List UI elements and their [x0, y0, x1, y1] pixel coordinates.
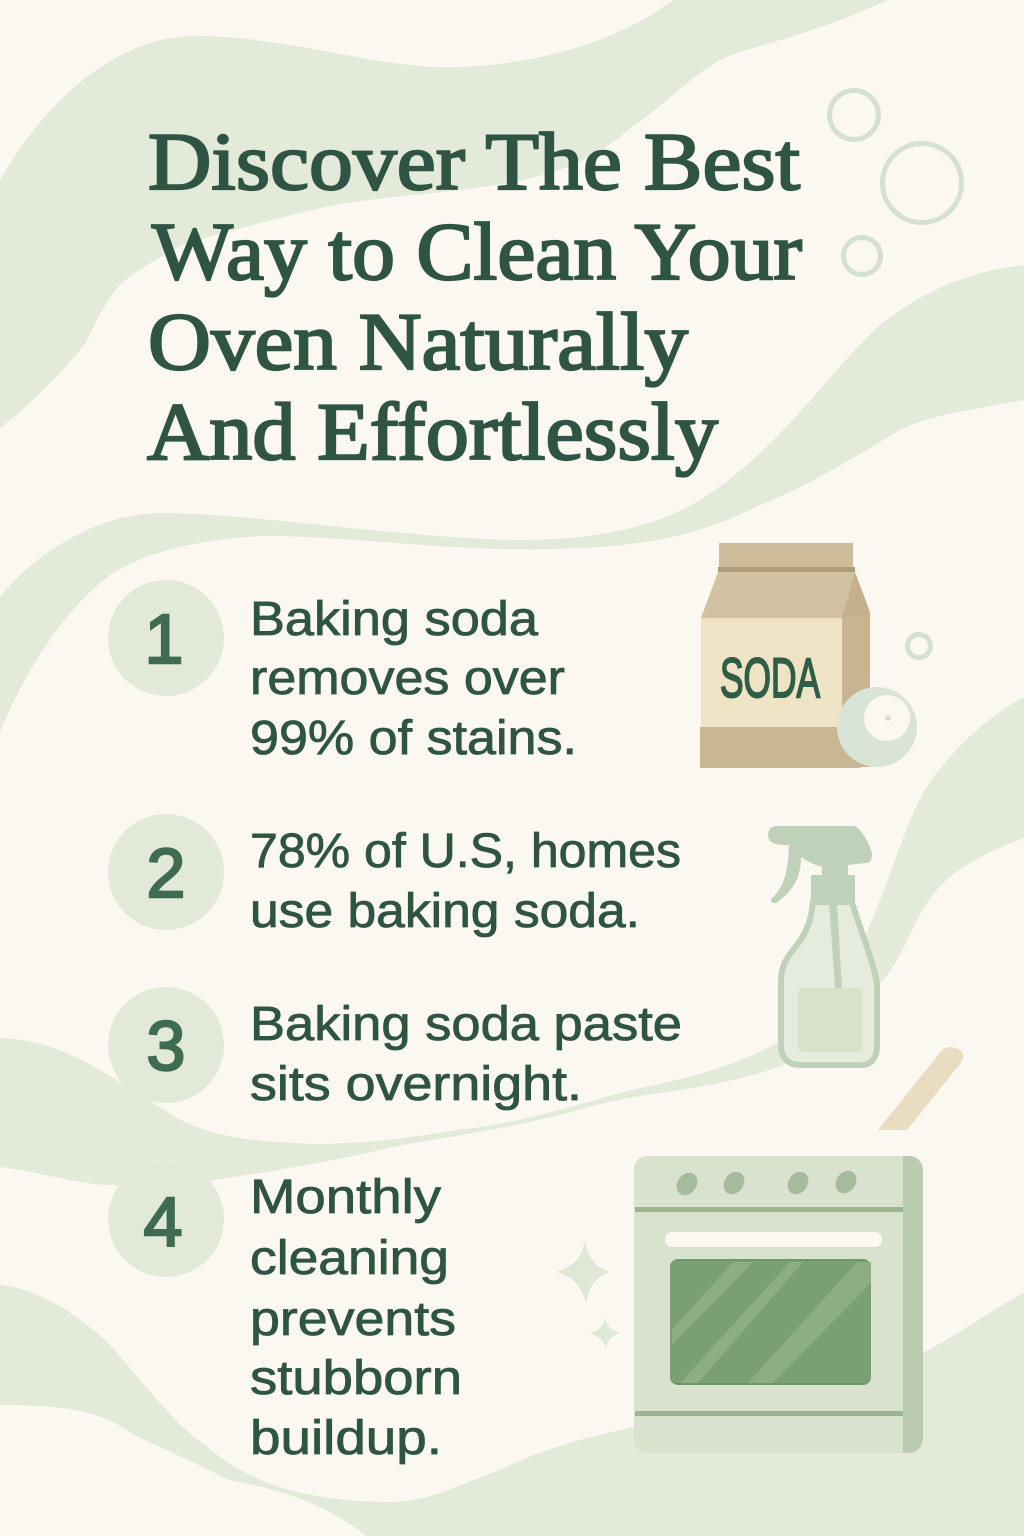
step 4: Monthly: [250, 1171, 441, 1224]
step 2: 2: [147, 834, 185, 912]
icon: soda box: SODA: [720, 646, 820, 709]
title: Way to Clean Your: [152, 206, 802, 297]
icon: bubbles near title: [830, 90, 962, 274]
step 4: prevents: [250, 1293, 456, 1346]
step 4: [108, 1161, 462, 1465]
step 4: cleaning: [250, 1232, 449, 1285]
panel: steps: [108, 580, 682, 1465]
step 4: buildup.: [250, 1412, 442, 1465]
icon: spatula: [878, 1047, 963, 1130]
step 3: sits overnight.: [250, 1058, 582, 1111]
step 1: 1: [145, 600, 183, 678]
title: And Effortlessly: [147, 386, 718, 477]
icon: oven: [634, 1156, 923, 1453]
icon: sparkles: [556, 1240, 620, 1348]
step 4: 4: [144, 1183, 182, 1261]
step 2: 78% of U.S, homes: [250, 825, 681, 878]
step 4: stubborn: [250, 1352, 462, 1405]
title: Discover The Best: [148, 116, 800, 207]
step 1: 99% of stains.: [250, 712, 577, 765]
icon: soda box: [700, 543, 930, 768]
step 1: removes over: [250, 652, 565, 705]
step 3: 3: [147, 1007, 185, 1085]
step 3: Baking soda paste: [250, 998, 682, 1051]
step 2: [108, 814, 681, 938]
step 3: [108, 987, 682, 1111]
title: [147, 116, 802, 477]
step 2: use baking soda.: [250, 885, 640, 938]
step 1: [108, 580, 577, 765]
step 1: Baking soda: [250, 593, 538, 646]
icon: spray bottle: [768, 826, 877, 1065]
title: Oven Naturally: [148, 296, 688, 387]
